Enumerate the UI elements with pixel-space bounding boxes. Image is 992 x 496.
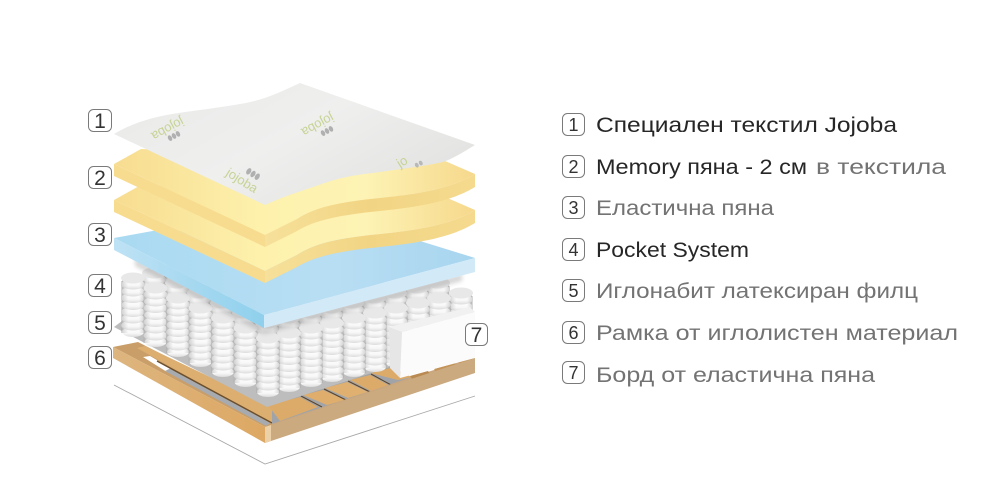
textile logo left: jojoba [148, 114, 188, 144]
diagram marker 2: 2 [94, 167, 106, 190]
legend item 6: Рамка от иглолистен материал [596, 321, 958, 345]
frame grey gap [165, 368, 272, 426]
diagram marker 6 [88, 346, 112, 370]
frame outer faces [113, 347, 265, 443]
layer 6: needle-leaf wooden frame [113, 342, 475, 443]
diagram marker 4: 4 [94, 275, 106, 298]
diagram marker 5: 5 [94, 312, 106, 335]
layer 7: elastic foam border [389, 307, 475, 378]
legend item 4: Pocket System [596, 238, 749, 262]
textile logo centre: jojoba [298, 110, 338, 140]
legend item 3: 3 [568, 198, 579, 218]
legend item 1: 1 [568, 115, 579, 135]
diagram marker 2 [88, 166, 112, 190]
frame base [113, 342, 290, 427]
layer 5: needled latex felt [114, 300, 390, 407]
legend item 2: в текстила [816, 155, 946, 179]
legend item 2 [562, 155, 946, 179]
diagram marker 1: 1 [94, 110, 106, 133]
diagram marker 1 [88, 110, 112, 133]
frame white gap [143, 356, 172, 372]
legend item 2: Memory пяна - 2 см [596, 155, 807, 179]
diagram marker 7: 7 [471, 324, 482, 347]
legend item 5: 5 [568, 281, 579, 301]
layer 3b: blue foam [114, 230, 475, 328]
frame cross slats [268, 357, 475, 428]
legend item 7: Борд от еластична пяна [596, 363, 875, 387]
diagram marker 3 [88, 224, 112, 247]
diagram marker 5 [88, 312, 112, 335]
legend item 4: 4 [568, 240, 579, 260]
layer 3: elastic foam [114, 185, 475, 283]
layer 2: memory foam [114, 149, 475, 247]
diagram marker 7 [466, 324, 488, 347]
legend item 3: Еластична пяна [596, 196, 774, 220]
textile logo front: jojoba [223, 164, 261, 196]
textile logo right [393, 152, 424, 171]
shadow under blue foam [135, 258, 462, 334]
legend item 2: 2 [568, 157, 579, 177]
legend item 1: Специален текстил Jojoba [596, 113, 897, 137]
textile logo right: jo [393, 152, 410, 171]
legend item 7: 7 [568, 363, 579, 383]
diagram marker 6: 6 [94, 347, 106, 370]
diagram marker 4 [88, 274, 112, 298]
legend list [562, 113, 958, 387]
layer 1: Jojoba special textile [114, 83, 475, 205]
mattress layers diagram [113, 83, 475, 464]
layer: base white sheet [114, 368, 475, 464]
layer 4: pocket spring system [121, 262, 473, 397]
frame inner slat [137, 346, 300, 424]
diagram marker 3: 3 [94, 224, 106, 247]
legend item 6: 6 [568, 323, 579, 343]
legend item 5: Иглонабит латексиран филц [596, 279, 918, 303]
